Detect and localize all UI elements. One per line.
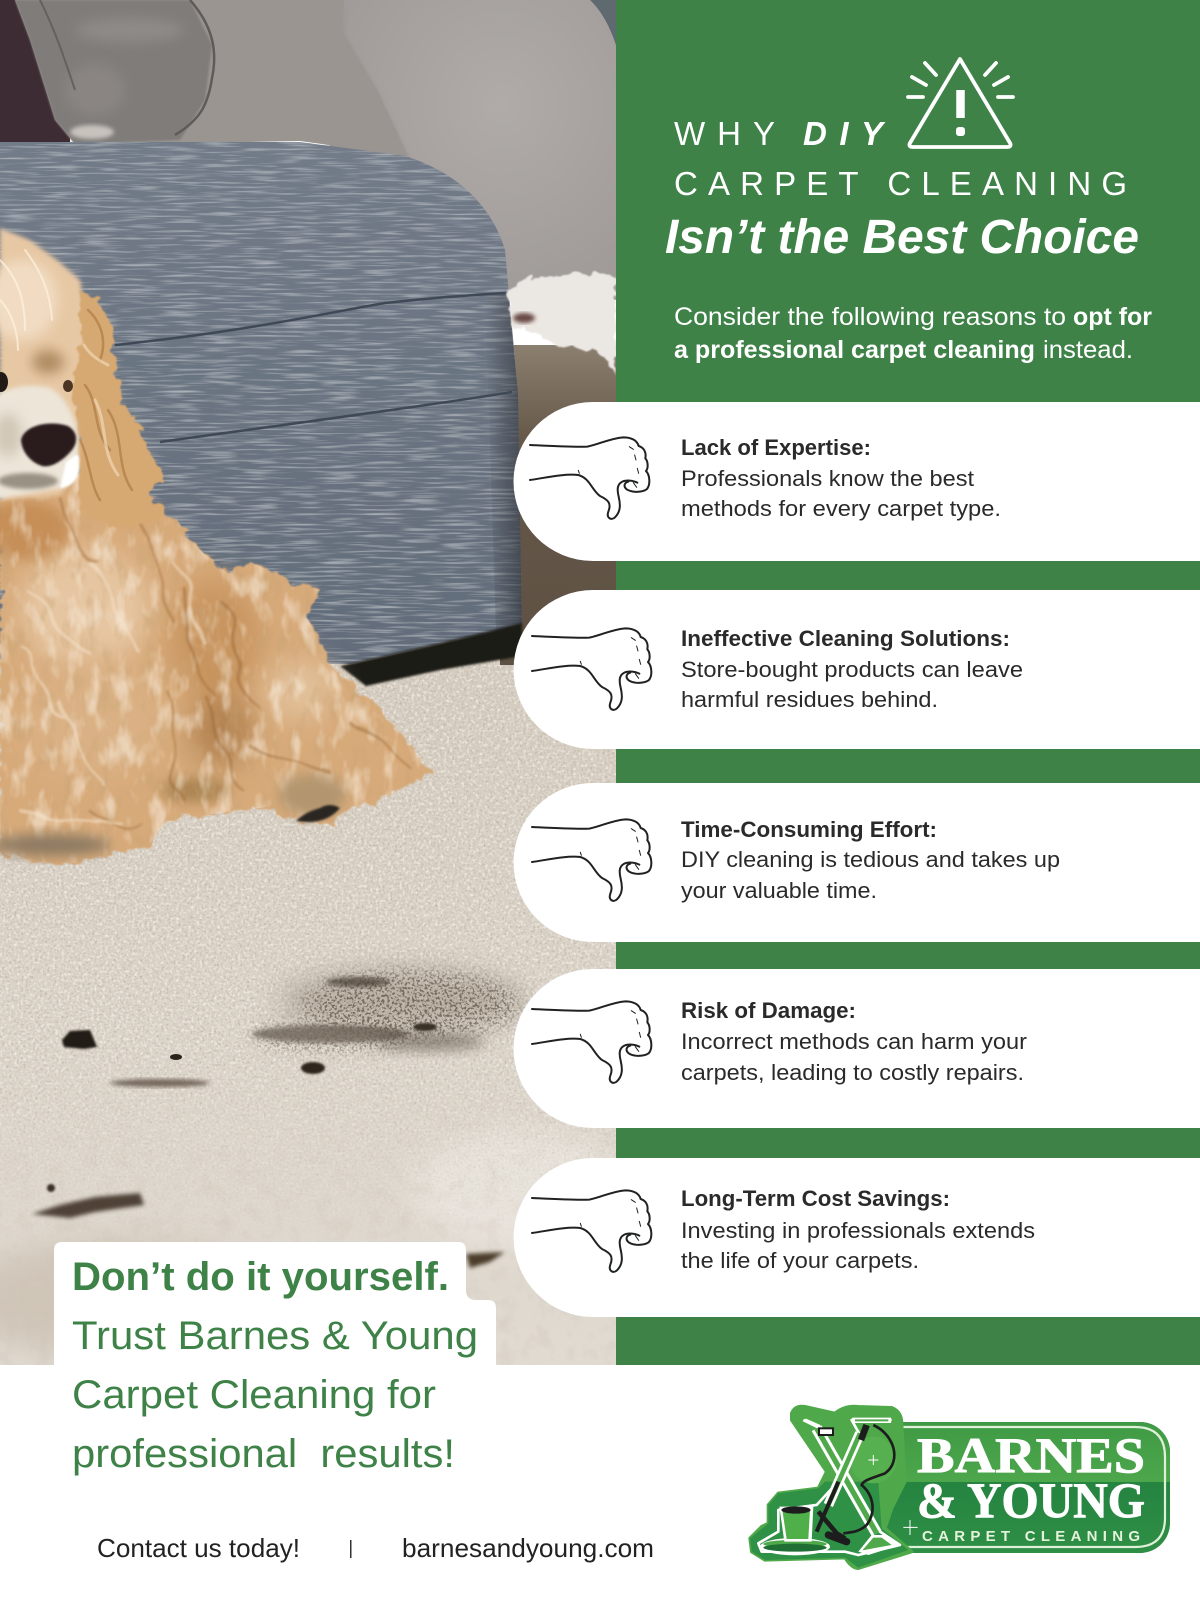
callout: don't do it yourself: Carpet Cleaning for bbox=[72, 1373, 436, 1417]
intro text: instead. bbox=[1043, 336, 1133, 364]
panel: lack of expertise bbox=[514, 402, 1200, 561]
callout: don't do it yourself bbox=[54, 1242, 496, 1476]
title line: why DIY: WHY bbox=[674, 115, 775, 152]
carpet bbox=[0, 640, 630, 1365]
contact line: barnesandyoung.com bbox=[402, 1533, 654, 1563]
logo: Barnes & Young Carpet Cleaning bbox=[750, 1406, 1170, 1568]
panel: risk of damage bbox=[514, 969, 1200, 1128]
reason text: carpets, leading to costly repairs. bbox=[681, 1060, 1024, 1085]
icon: thumbs down bbox=[532, 628, 651, 710]
icon: thumbs down bbox=[530, 437, 649, 519]
reason text: Professionals know the best bbox=[681, 466, 975, 491]
title line: why DIY: DIY bbox=[803, 115, 886, 152]
photo: dog on a soiled carpet next to a sofa bbox=[0, 0, 630, 1365]
green side panel bbox=[616, 0, 1200, 1365]
dog body bbox=[0, 470, 433, 863]
logo tagline: CARPET CLEANING bbox=[922, 1528, 1140, 1545]
callout: don't do it yourself: Trust Barnes & Young bbox=[72, 1314, 478, 1358]
soil stains bbox=[32, 970, 525, 1268]
icon: thumbs down bbox=[532, 819, 651, 901]
heading bbox=[665, 59, 1152, 364]
reason text: the life of your carpets. bbox=[681, 1248, 919, 1273]
panel: time-consuming effort bbox=[514, 783, 1200, 942]
grey back cushion bbox=[330, 0, 616, 300]
title line: carpet cleaning: CARPET CLEANING bbox=[674, 165, 1127, 202]
reason text bbox=[681, 626, 1023, 712]
reason text: Long-Term Cost Savings: bbox=[681, 1186, 950, 1211]
intro text: opt for bbox=[1073, 303, 1152, 331]
intro text bbox=[674, 303, 1152, 364]
dark maroon pillow bbox=[0, 0, 70, 145]
contact line: Contact us today! bbox=[97, 1533, 300, 1563]
reason text: DIY cleaning is tedious and takes up bbox=[681, 847, 1060, 872]
reason text bbox=[681, 435, 1001, 521]
icon: thumbs down bbox=[532, 1190, 651, 1272]
reason text bbox=[681, 1186, 1035, 1273]
reason text: Risk of Damage: bbox=[681, 998, 856, 1023]
logo wordmark: BARNES bbox=[917, 1427, 1145, 1483]
title line: why DIY bbox=[674, 115, 886, 152]
reason text: Ineffective Cleaning Solutions: bbox=[681, 626, 1010, 651]
back wall and side table bbox=[500, 345, 616, 665]
reason text: Investing in professionals extends bbox=[681, 1218, 1035, 1243]
dog head bbox=[0, 228, 88, 500]
title line: isn't the best choice: Isn’t the Best Choice bbox=[665, 211, 1139, 264]
panel: long-term cost savings bbox=[514, 1158, 1200, 1317]
reason text: Lack of Expertise: bbox=[681, 435, 871, 460]
intro text: a professional carpet cleaning bbox=[674, 336, 1035, 364]
reason text: Incorrect methods can harm your bbox=[681, 1029, 1028, 1054]
reason text: your valuable time. bbox=[681, 878, 877, 903]
dog muzzle bbox=[0, 386, 78, 500]
dog ear bbox=[72, 290, 167, 530]
reason text: methods for every carpet type. bbox=[681, 496, 1001, 521]
callout: don't do it yourself: professional results! bbox=[72, 1432, 455, 1476]
fur texture bbox=[0, 521, 411, 863]
reason text bbox=[681, 817, 1060, 903]
dog nose bbox=[21, 424, 76, 466]
logo wordmark bbox=[917, 1427, 1145, 1528]
reason text: Time-Consuming Effort: bbox=[681, 817, 937, 842]
callout: don't do it yourself: Don’t do it yourself. bbox=[72, 1255, 449, 1299]
icon: warning triangle bbox=[908, 59, 1013, 147]
linen pillow bbox=[15, 0, 408, 170]
sofa seat bbox=[0, 142, 522, 686]
dog bbox=[0, 228, 433, 863]
reason text bbox=[681, 998, 1028, 1085]
emblem white outline bbox=[758, 1420, 900, 1555]
intro text: Consider the following reasons to bbox=[674, 303, 1066, 331]
logo banner bbox=[860, 1422, 1170, 1553]
reason text: harmful residues behind. bbox=[681, 687, 938, 712]
white fluffy rug bbox=[506, 274, 616, 372]
reason text: Store-bought products can leave bbox=[681, 657, 1023, 682]
logo emblem bbox=[750, 1406, 918, 1568]
logo wordmark: & YOUNG bbox=[917, 1472, 1145, 1528]
dog eye bbox=[0, 372, 8, 392]
icon: thumbs down bbox=[532, 1001, 651, 1083]
contact line bbox=[97, 1533, 654, 1563]
panel: ineffective cleaning solutions bbox=[514, 590, 1200, 749]
